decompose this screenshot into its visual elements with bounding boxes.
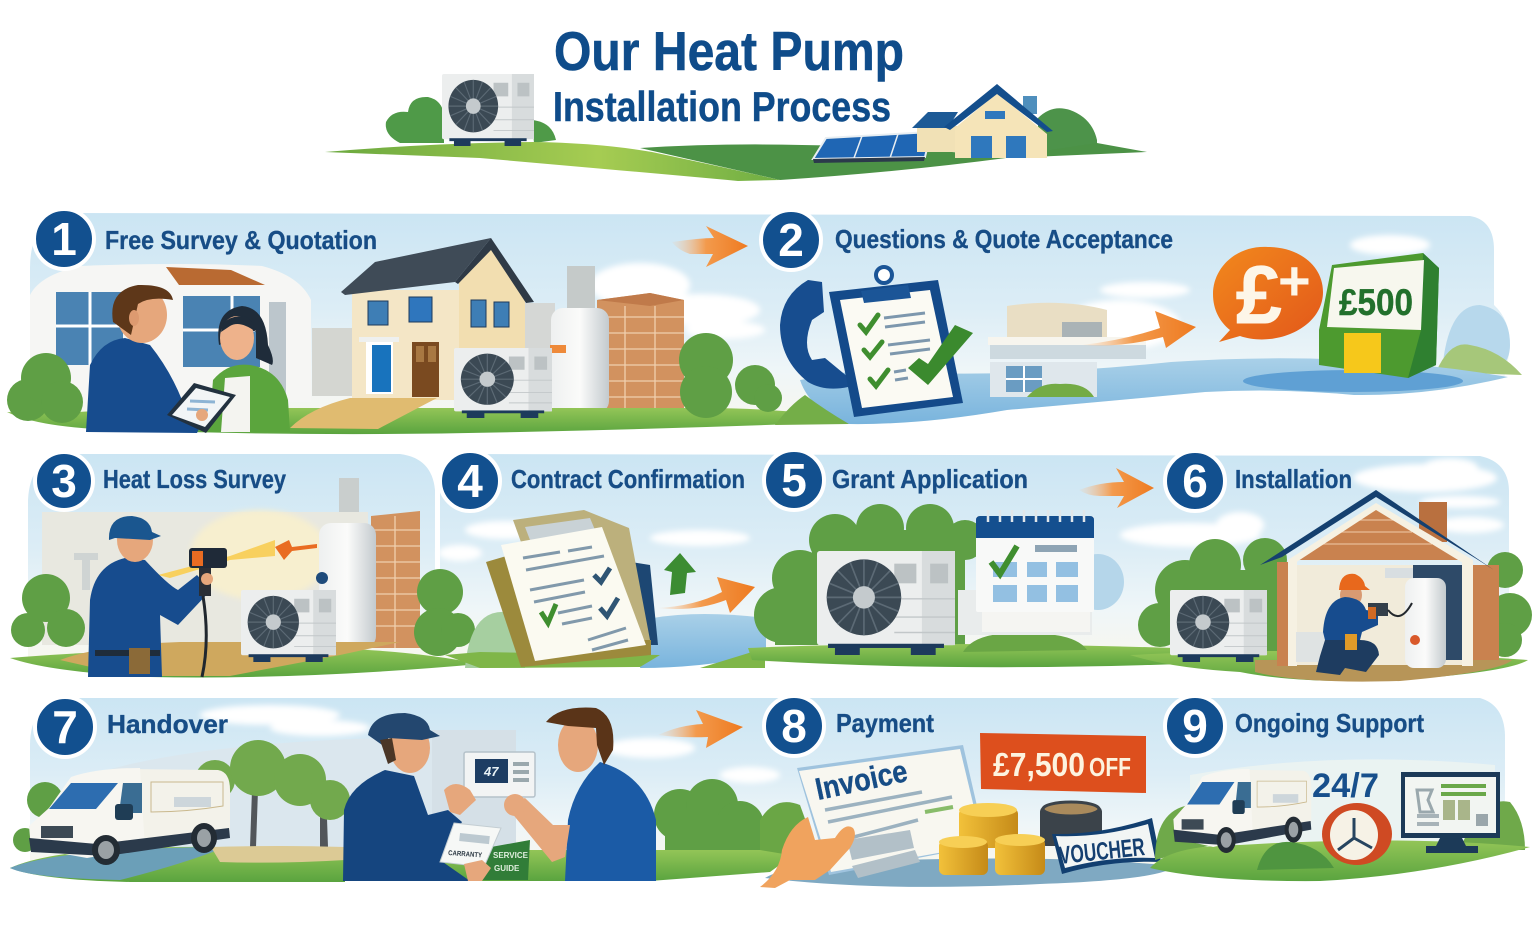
step 1 heading: Free Survey & Quotation xyxy=(105,225,377,255)
sub heading: Installation Process xyxy=(553,83,891,130)
step 7 badge xyxy=(35,697,95,757)
icon: white van xyxy=(29,768,230,865)
icon: pound speech bubble xyxy=(1213,247,1323,342)
water ground xyxy=(765,858,1176,887)
icon: clock xyxy=(1322,803,1392,865)
step 2 badge: 2 xyxy=(778,214,804,266)
surveyor with thermal camera xyxy=(88,516,227,677)
step 8 badge: 8 xyxy=(781,700,807,752)
main heading: Our Heat Pump xyxy=(554,20,904,82)
panel: step 9 ongoing support xyxy=(1150,696,1530,881)
icon: £500 green sign xyxy=(1319,253,1439,378)
step 3 badge xyxy=(35,452,93,510)
hump xyxy=(1072,554,1124,610)
step 7 badge: 7 xyxy=(52,701,78,753)
panel: step 7 handover xyxy=(10,697,800,882)
arrow to £ bubble xyxy=(1082,311,1196,348)
background wall xyxy=(42,478,420,648)
24/7 label: 24/7 xyxy=(1312,767,1379,805)
guide label: GUIDE xyxy=(494,864,520,873)
title landscape xyxy=(325,74,1147,181)
step 4 heading: Contract Confirmation xyxy=(511,464,745,494)
clouds xyxy=(1060,235,1430,350)
trees xyxy=(754,504,985,645)
arrow to step 2 xyxy=(672,226,748,267)
step 2 badge xyxy=(761,210,821,270)
step 6 heading: Installation xyxy=(1235,464,1352,494)
£7,500 label: £7,500 xyxy=(993,746,1085,783)
voucher tag xyxy=(1040,802,1161,874)
bush by clock xyxy=(1257,842,1334,870)
bushes xyxy=(760,802,820,860)
icon: title house xyxy=(912,84,1053,158)
plus sign: + xyxy=(1278,249,1311,312)
icon: service van xyxy=(1173,769,1311,853)
clouds xyxy=(438,521,750,561)
handover documents xyxy=(440,823,530,881)
building in distance xyxy=(988,303,1146,397)
icon: solar panels xyxy=(813,132,931,163)
trees xyxy=(1138,538,1532,657)
title xyxy=(325,20,1147,181)
people: surveyor and customer xyxy=(86,285,290,433)
step 3 badge: 3 xyxy=(51,455,77,507)
panel: step 5 grant application xyxy=(748,450,1180,667)
step 9 heading: Ongoing Support xyxy=(1235,708,1424,738)
icon: title heat pump xyxy=(442,74,534,146)
step 9 badge: 9 xyxy=(1182,700,1208,752)
ground 6 xyxy=(1130,651,1528,681)
thermal beam xyxy=(158,540,317,578)
gold coins xyxy=(939,803,1045,875)
chimney, cylinder and brick wall xyxy=(550,266,684,413)
icon: heat pump xyxy=(454,348,552,418)
hill and bushes xyxy=(1155,759,1525,860)
bushes xyxy=(7,333,782,423)
step 4 badge xyxy=(440,451,500,511)
step 1 badge xyxy=(34,209,94,269)
icon: heat pump xyxy=(817,551,955,655)
ground 5 xyxy=(748,644,1180,667)
office building xyxy=(30,264,352,402)
voucher label: VOUCHER xyxy=(1058,833,1146,870)
invoice label: Invoice xyxy=(812,753,910,807)
clouds xyxy=(200,705,780,783)
panel: step 8 payment xyxy=(760,696,1176,888)
icon: calendar xyxy=(958,510,1094,635)
panel: step 4 contract confirmation xyxy=(438,451,766,668)
trees xyxy=(11,569,475,656)
panel: step 1 free survey and quotation xyxy=(7,209,870,434)
house xyxy=(341,238,555,400)
panel: step 2 questions and quote acceptance xyxy=(761,210,1522,425)
OFF label: OFF xyxy=(1089,752,1131,782)
step 8 badge xyxy=(764,696,824,756)
pound sign: £ xyxy=(1236,250,1282,341)
hump and distant bush xyxy=(1436,305,1522,375)
step 1 badge: 1 xyxy=(51,213,77,265)
step 5 badge xyxy=(764,450,824,510)
£500 label: £500 xyxy=(1339,282,1413,323)
warranty label: CARRANTY xyxy=(448,850,483,859)
icon: large green check xyxy=(908,325,973,385)
icon: heat pump xyxy=(241,590,336,662)
icon: clipboard with checklist xyxy=(829,267,963,417)
icon: contract clipboard xyxy=(486,510,658,667)
ground 9 xyxy=(1150,840,1530,881)
house with garage xyxy=(1260,490,1499,668)
arrow to step 8 xyxy=(658,710,743,748)
icon: telephone handset xyxy=(780,280,854,389)
installer kneeling xyxy=(1316,574,1412,675)
background building and hill xyxy=(90,730,516,858)
step 8 heading: Payment xyxy=(836,708,934,738)
water xyxy=(800,358,1508,424)
invoice with hand xyxy=(760,745,986,888)
discount banner xyxy=(980,733,1146,793)
icon: monitor dashboard xyxy=(1401,772,1500,853)
ground 7 xyxy=(344,850,800,881)
step 2 heading: Questions & Quote Acceptance xyxy=(835,224,1173,254)
panel: step 3 heat loss survey xyxy=(10,452,480,677)
thermostat display xyxy=(464,752,535,797)
step 7 heading: Handover xyxy=(107,709,228,739)
hills and water xyxy=(445,612,766,668)
panel: step 6 installation xyxy=(1120,451,1532,682)
step 5 heading: Grant Application xyxy=(832,464,1028,494)
ground 3 xyxy=(10,648,480,677)
panels row 3 background xyxy=(30,698,1505,868)
step 6 badge: 6 xyxy=(1182,455,1208,507)
green up arrow xyxy=(664,553,696,595)
step 3 heading: Heat Loss Survey xyxy=(103,464,286,494)
clouds xyxy=(590,263,765,339)
icon: heat pump xyxy=(1170,590,1267,662)
step 9 badge xyxy=(1165,696,1225,756)
clouds xyxy=(1120,458,1504,547)
step 4 badge: 4 xyxy=(457,455,483,507)
panels row 1 background xyxy=(30,213,1510,424)
thermostat reading: 47 xyxy=(483,764,499,779)
step 5 badge: 5 xyxy=(781,454,807,506)
step 6 badge xyxy=(1165,451,1225,511)
panels row 2 background xyxy=(28,454,1509,662)
service label: SERVICE xyxy=(493,851,529,860)
arrow to step 6 xyxy=(1079,468,1154,508)
trees xyxy=(13,740,764,857)
people: engineer and customer xyxy=(343,708,656,881)
orange arrow xyxy=(658,577,755,613)
ground 1 xyxy=(7,408,870,434)
